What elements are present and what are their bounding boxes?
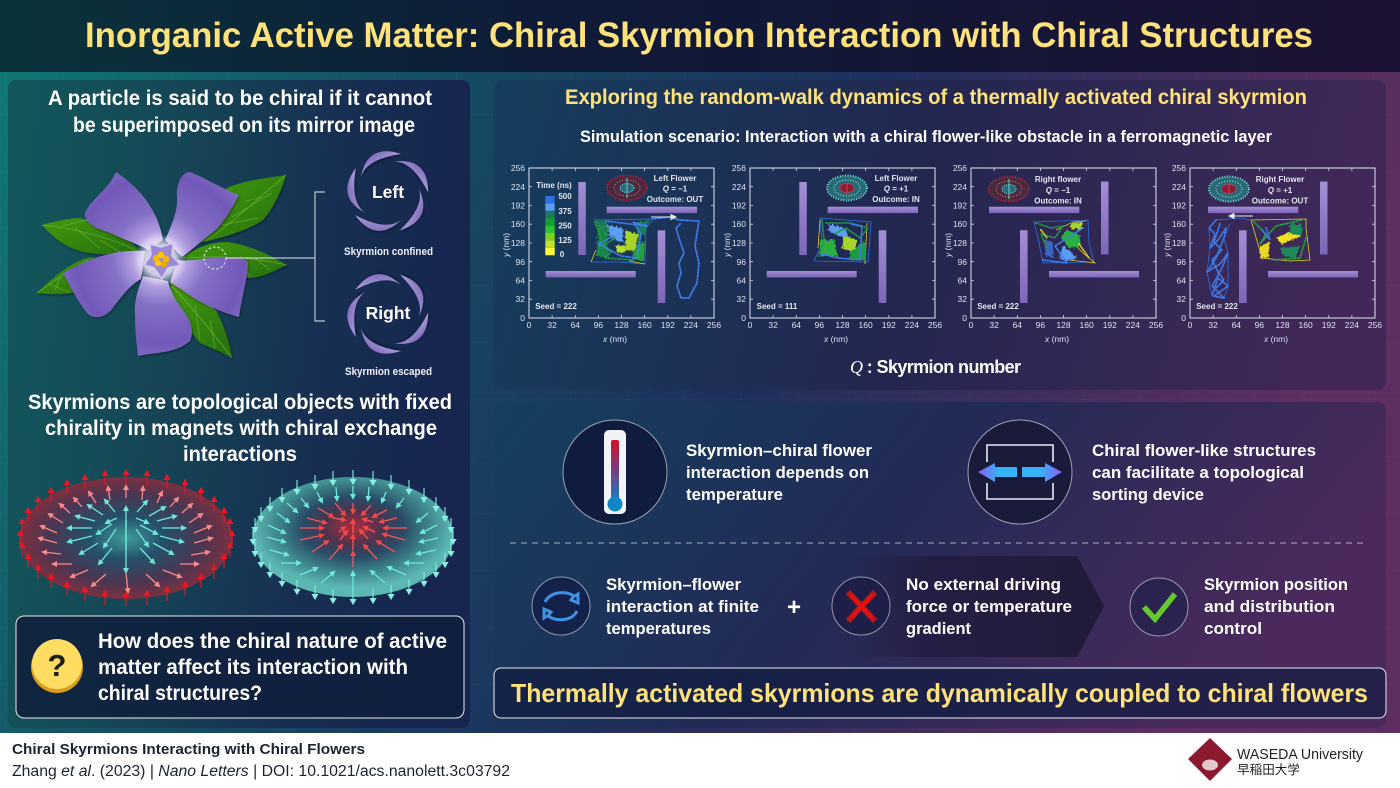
chart: right flower Q = +1: 0 [1181, 313, 1186, 323]
icon: question mark: ? [48, 648, 66, 683]
chart: right flower Q = -1: 160 [953, 219, 967, 229]
diagram: skyrmion Q = +1 [250, 470, 456, 604]
text: sorting device: Chiral flower-like structures [1092, 441, 1316, 460]
panel: simulation results [493, 80, 1386, 390]
chart: left flower Q = -1: 128 [511, 238, 525, 248]
icon: interaction cycle [532, 577, 590, 635]
chart: right flower Q = +1: 32 [1177, 294, 1186, 304]
heading: random-walk dynamics: Exploring the random-walk dynamics of a thermally activated chiral skyrmion [565, 86, 1307, 109]
footer: citation [0, 733, 1400, 788]
arrow: escape direction [1229, 214, 1253, 218]
chart: left flower Q = -1: 128 [614, 320, 629, 330]
chart: right flower Q = +1: 96 [1255, 320, 1264, 330]
text: finite temperatures: temperatures [606, 619, 711, 638]
chart: left flower Q = -1: 96 [594, 320, 603, 330]
chart: right flower Q = +1: 160 [1299, 320, 1313, 330]
chart: right flower Q = -1: Outcome: IN [1034, 196, 1082, 206]
icon: question mark [31, 639, 83, 693]
callout: conclusion: Thermally activated skyrmions are dynamically coupled to chiral flowers [511, 678, 1368, 708]
icon: right-handed flower [341, 264, 434, 378]
diagram: skyrmion Q = -1 [17, 470, 235, 606]
colour bar legend: 0 [560, 250, 565, 259]
heading: skyrmions: interactions [183, 443, 297, 466]
plus sign: + [787, 594, 801, 621]
text: no external force: No external driving [906, 575, 1061, 594]
heading: chiral particle definition [48, 87, 432, 137]
chart: right flower Q = +1: x (nm) [1263, 334, 1288, 344]
header bar with title: Inorganic Active Matter: Chiral Skyrmion Interaction with Chiral Structures [85, 16, 1313, 55]
icon: sorting arrows [968, 420, 1072, 524]
chart: right flower Q = -1 [943, 163, 1163, 344]
colour bar legend: 375 [558, 207, 572, 216]
chart: left flower Q = +1: 0 [741, 313, 746, 323]
icon: right-handed flower: Skyrmion escaped [345, 366, 432, 378]
chart: right flower Q = -1: 64 [958, 276, 967, 286]
chart: right flower Q = +1: 192 [1322, 320, 1336, 330]
zoom circle and connector bracket [204, 192, 325, 321]
subheading: simulation scenario: Simulation scenario: Interaction with a chiral flower-like obstacle in a ferromagnetic layer [580, 127, 1272, 146]
icon: thermometer [563, 420, 667, 524]
chart: left flower Q = +1: 224 [905, 320, 919, 330]
chart: right flower Q = -1: 64 [1013, 320, 1022, 330]
chart: left flower Q = +1: Left Flower [875, 174, 917, 183]
chart: right flower Q = +1: 224 [1172, 182, 1186, 192]
callout: research question [16, 616, 464, 718]
chart: left flower Q = -1: 224 [511, 182, 525, 192]
chart: right flower Q = -1: 128 [953, 238, 967, 248]
chart: left flower Q = -1: y (nm) [501, 233, 511, 258]
chart: left flower Q = +1: Q = +1 [884, 184, 909, 194]
chart: left flower Q = -1: 32 [547, 320, 557, 330]
heading: chiral particle definition: A particle is said to be chiral if it cannot [48, 87, 432, 110]
icon: left-handed flower: Skyrmion confined [344, 246, 433, 258]
chart: left flower Q = -1: 192 [511, 200, 525, 210]
text: sorting device: can facilitate a topological [1092, 463, 1304, 482]
callout text: matter affect its interaction with [98, 656, 408, 679]
chart: left flower Q = +1: 64 [737, 276, 746, 286]
chart: left flower Q = -1: 160 [511, 219, 525, 229]
text: sorting device: sorting device [1092, 485, 1204, 504]
chart: left flower Q = -1: 160 [638, 320, 652, 330]
icon: check mark [1130, 578, 1188, 636]
panel: chirality and skyrmions [8, 80, 470, 728]
trajectory [1034, 220, 1095, 263]
callout: conclusion [494, 668, 1386, 718]
caption: skyrmion number: Q : Skyrmion number [850, 357, 1021, 377]
text: position control: control [1204, 619, 1262, 638]
logo: Waseda University: 早稲田大学 [1237, 762, 1300, 777]
flower centre [134, 234, 186, 286]
chart: right flower Q = +1: 160 [1172, 219, 1186, 229]
chart: left flower Q = +1: Outcome: IN [872, 195, 920, 204]
chart: right flower Q = -1: y (nm) [943, 233, 953, 258]
text: finite temperatures: interaction at finite [606, 597, 759, 616]
chart: left flower Q = +1: 160 [859, 320, 873, 330]
heading: skyrmions [28, 391, 452, 466]
chart: left flower Q = -1: Q = −1 [663, 184, 688, 194]
chart: right flower Q = +1: 0 [1188, 320, 1193, 330]
icon: left-handed flower [341, 151, 434, 258]
chart: left flower Q = -1: 256 [707, 320, 721, 330]
chart: right flower Q = +1: Q = +1 [1268, 186, 1293, 195]
chart: right flower Q = -1: 192 [953, 200, 967, 210]
chart: right flower Q = -1: Seed = 222 [977, 302, 1019, 311]
chart: right flower Q = -1: Q = −1 [1046, 186, 1071, 195]
footer: citation: Zhang et al. (2023) | Nano Letters | DOI: 10.1021/acs.nanolett.3c03792 [12, 763, 510, 780]
chart: right flower Q = -1: 256 [953, 163, 967, 173]
header bar with title [0, 0, 1400, 72]
chart: right flower Q = +1: 128 [1172, 238, 1186, 248]
chart: right flower Q = -1: 96 [1036, 320, 1045, 330]
chart: right flower Q = -1: x (nm) [1044, 334, 1069, 344]
chart: left flower Q = -1 [501, 163, 721, 344]
text: no external force [906, 575, 1072, 638]
text: position control: Skyrmion position [1204, 575, 1348, 594]
chart: left flower Q = -1: 0 [527, 320, 532, 330]
chart: right flower Q = +1: 32 [1208, 320, 1218, 330]
panel: conclusions [493, 402, 1386, 728]
chart: left flower Q = +1: x (nm) [823, 334, 848, 344]
chart: right flower Q = -1: 224 [1126, 320, 1140, 330]
icon: cross [832, 577, 890, 635]
callout text [98, 630, 447, 705]
chart: left flower Q = +1: 192 [882, 320, 896, 330]
leaves [37, 175, 287, 358]
chart: right flower Q = +1: 96 [1177, 257, 1186, 267]
chart: right flower Q = +1: y (nm) [1162, 233, 1172, 258]
chart: right flower Q = -1: Right flower [1035, 175, 1081, 184]
chart: right flower Q = +1: Outcome: OUT [1252, 196, 1308, 206]
heading: skyrmions: chirality in magnets with chiral exchange [45, 417, 437, 440]
chart: left flower Q = -1: x (nm) [602, 334, 627, 344]
chart: left flower Q = -1: 0 [520, 313, 525, 323]
chart: left flower Q = -1: 224 [684, 320, 698, 330]
chart: left flower Q = -1: 64 [516, 276, 525, 286]
chart: right flower Q = -1: 160 [1080, 320, 1094, 330]
chart: left flower Q = +1: 0 [748, 320, 753, 330]
chart: right flower Q = -1: 96 [958, 257, 967, 267]
chart: left flower Q = +1: 96 [737, 257, 746, 267]
chart: left flower Q = -1: Left Flower [654, 174, 696, 183]
chart: right flower Q = -1: 224 [953, 182, 967, 192]
chart: right flower Q = +1: 256 [1368, 320, 1382, 330]
heading: skyrmions: Skyrmions are topological objects with fixed [28, 391, 452, 414]
chart: left flower Q = -1: 256 [511, 163, 525, 173]
chart: left flower Q = +1: 128 [835, 320, 850, 330]
trajectory [814, 218, 871, 264]
text: finite temperatures: Skyrmion–flower [606, 575, 741, 594]
chart: left flower Q = -1: Seed = 222 [535, 302, 577, 311]
text: position control: and distribution [1204, 597, 1335, 616]
text: position control [1204, 575, 1348, 638]
chart: left flower Q = +1: 32 [768, 320, 778, 330]
chart: right flower Q = +1: Right Flower [1256, 175, 1304, 184]
chart: right flower Q = +1: 256 [1172, 163, 1186, 173]
logo: Waseda University [1188, 738, 1363, 781]
arrow: escape direction [651, 214, 676, 220]
chart: left flower Q = -1: 96 [516, 257, 525, 267]
chart: left flower Q = -1: 192 [661, 320, 675, 330]
text: no external force: force or temperature [906, 597, 1072, 616]
chart: left flower Q = +1: Seed = 111 [757, 302, 798, 311]
chart: left flower Q = +1: 96 [815, 320, 824, 330]
colour bar legend: Time (ns) [536, 181, 572, 190]
chart: right flower Q = +1: 128 [1275, 320, 1290, 330]
chart: left flower Q = -1: Outcome: OUT [647, 195, 703, 204]
trajectory [591, 217, 699, 298]
chart: left flower Q = +1 [722, 163, 942, 344]
petals [63, 172, 248, 356]
chart: left flower Q = -1: 32 [516, 294, 525, 304]
text: sorting device [1092, 441, 1316, 504]
chart: right flower Q = +1: 192 [1172, 200, 1186, 210]
logo: Waseda University: WASEDA University [1237, 746, 1363, 763]
colour bar legend [536, 181, 572, 259]
illustration: chiral flower [37, 172, 325, 358]
chart: right flower Q = -1: 256 [1149, 320, 1163, 330]
callout text: chiral structures? [98, 682, 262, 705]
chart: right flower Q = -1: 128 [1056, 320, 1071, 330]
icon: right-handed flower: Right [366, 303, 411, 323]
chart: left flower Q = +1: y (nm) [722, 233, 732, 258]
icon: left-handed flower: Left [372, 182, 404, 202]
heading: chiral particle definition: be superimposed on its mirror image [73, 114, 415, 137]
chart: right flower Q = +1 [1162, 163, 1382, 344]
text: temperature dependence: temperature [686, 485, 783, 504]
colour bar legend: 125 [558, 236, 572, 245]
chart: left flower Q = +1: 256 [732, 163, 746, 173]
chart: left flower Q = +1: 128 [732, 238, 746, 248]
chart: left flower Q = +1: 256 [928, 320, 942, 330]
chart: right flower Q = -1: 0 [969, 320, 974, 330]
chart: left flower Q = -1: 64 [571, 320, 580, 330]
chart: left flower Q = +1: 64 [792, 320, 801, 330]
colour bar legend: 500 [558, 192, 572, 201]
text: temperature dependence: Skyrmion–chiral flower [686, 441, 872, 460]
text: temperature dependence [686, 441, 872, 504]
chart: right flower Q = -1: 0 [962, 313, 967, 323]
chart: right flower Q = +1: Seed = 222 [1196, 302, 1238, 311]
chart: right flower Q = +1: 64 [1232, 320, 1241, 330]
leaf veins [37, 175, 287, 358]
chart: left flower Q = +1: 160 [732, 219, 746, 229]
text: finite temperatures [606, 575, 759, 638]
arrow: chevron background [850, 556, 1104, 657]
colour bar legend: 250 [558, 222, 572, 230]
footer: citation: Chiral Skyrmions Interacting with Chiral Flowers [12, 742, 365, 758]
callout text: How does the chiral nature of active [98, 630, 447, 653]
text: temperature dependence: interaction depends on [686, 463, 869, 482]
chart: right flower Q = -1: 192 [1103, 320, 1117, 330]
chart: right flower Q = -1: 32 [989, 320, 999, 330]
chart: left flower Q = +1: 192 [732, 200, 746, 210]
chart: right flower Q = +1: 64 [1177, 276, 1186, 286]
chart: right flower Q = -1: 32 [958, 294, 967, 304]
chart: left flower Q = +1: 224 [732, 182, 746, 192]
text: no external force: gradient [906, 619, 971, 638]
chart: right flower Q = +1: 224 [1345, 320, 1359, 330]
chart: left flower Q = +1: 32 [737, 294, 746, 304]
trajectory [1207, 218, 1310, 298]
